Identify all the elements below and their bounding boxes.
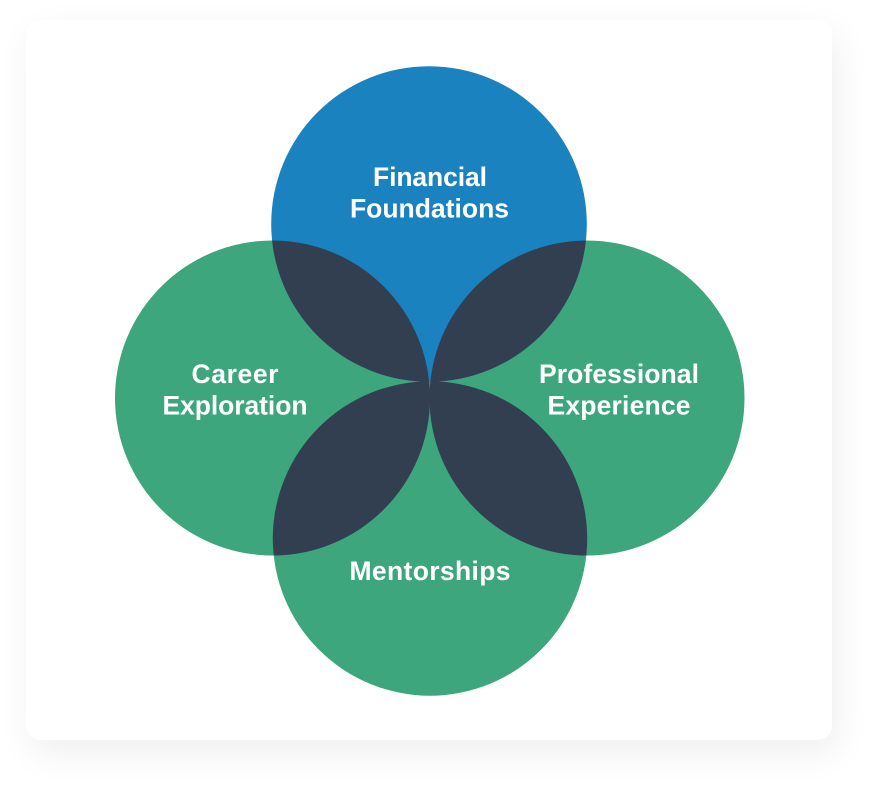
overlap: top right [430, 240, 586, 382]
overlap: top left [272, 240, 430, 382]
label: Career Exploration: Career [192, 359, 278, 389]
overlap: bottom left [272, 381, 430, 556]
label: Financial Foundations: Financial [373, 162, 487, 192]
label: Career Exploration: Exploration [162, 390, 308, 420]
circle: Career Exploration [115, 240, 430, 556]
venn diagram [115, 66, 744, 696]
label: Professional Experience: Professional [539, 359, 699, 389]
overlap: bottom right [430, 381, 588, 556]
label: Financial Foundations: Foundations [350, 194, 509, 224]
label: Financial Foundations [350, 162, 509, 224]
label: Career Exploration [162, 359, 308, 420]
circle: Mentorships [273, 381, 587, 696]
label: Professional Experience: Experience [548, 390, 690, 420]
circle: Professional Experience [430, 240, 744, 556]
circle: Financial Foundations [271, 66, 587, 382]
label: Mentorships: Mentorships [350, 556, 510, 586]
label: Professional Experience [539, 359, 699, 420]
